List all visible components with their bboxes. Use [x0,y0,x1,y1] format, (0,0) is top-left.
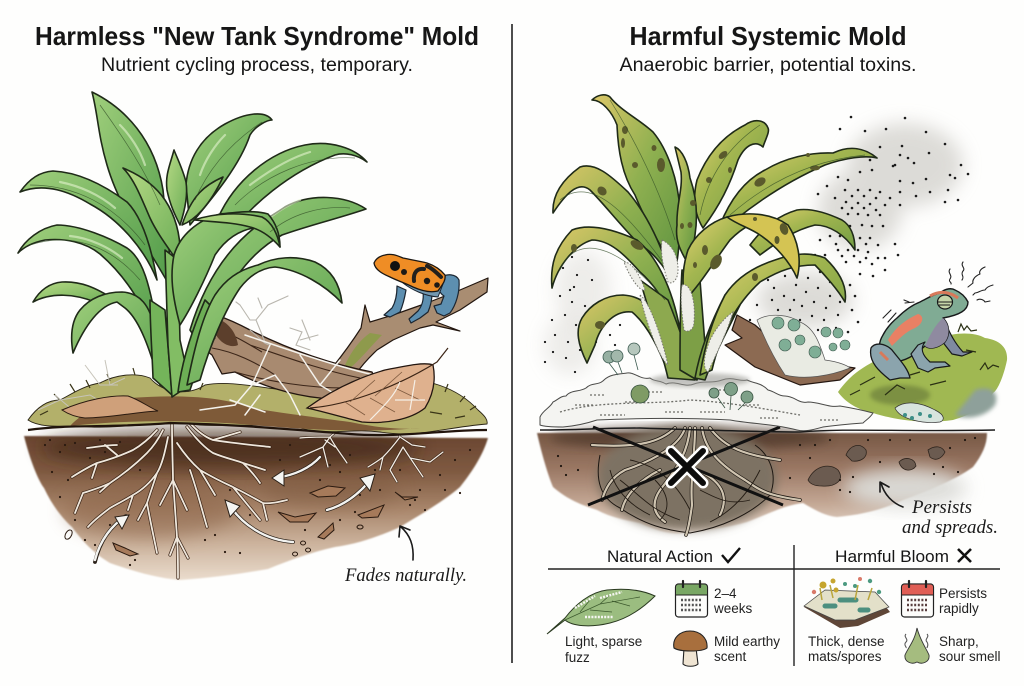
white fuzz on stems [624,240,733,372]
frog front legs [384,286,406,317]
fallen leaf left [62,396,158,418]
healthy plant [18,92,367,397]
sick frog [871,262,993,380]
mold fruiting bodies [631,382,753,410]
label: persists rapidly: rapidly [939,601,979,616]
label: sharp sour smell: Sharp, [939,634,979,649]
thin surface mycelium [38,360,125,412]
callout: fades naturally: Fades naturally. [344,565,467,586]
center divider [511,24,513,663]
crossed-out X over roots [588,427,783,505]
buried debris [113,486,418,556]
label: thick dense mats: mats/spores [808,649,882,664]
soil speckles [45,440,470,565]
leaf spots [571,126,820,329]
label: sharp sour smell [939,634,1001,664]
label: 2-4 weeks: 2–4 [714,586,737,601]
subheading: harmless: Nutrient cycling process, temporary. [101,55,413,76]
label: persists rapidly: Persists [939,586,987,601]
frog body [880,289,968,362]
stems [150,300,172,395]
dark lumps [808,445,945,486]
rotting log [203,315,378,398]
label: mild earthy scent: scent [714,649,747,664]
moldy stems [640,280,695,380]
label: light sparse fuzz [565,634,642,665]
frog body [374,254,445,292]
mossy branch [332,278,488,374]
label: light sparse fuzz: Light, sparse [565,634,642,649]
label: thick dense mats: Thick, dense [808,634,885,649]
frog rear leg [434,275,459,316]
icon: cross mark [958,549,971,562]
dry leaf right [307,348,448,422]
mycelium threads [200,296,410,420]
moss and topsoil surface [28,360,487,435]
heading: harmful: Harmful Systemic Mold [630,21,906,51]
spore dots [815,117,968,332]
sick log with fungus [725,315,855,385]
icon: red calendar [902,581,934,617]
heading: harmless: Harmless "New Tank Syndrome" Mold [35,21,479,51]
distress lines [883,262,993,322]
center leaves [167,150,187,225]
diseased plant [552,95,877,380]
arrow and callout: persists and spreads [880,482,998,538]
soil cross-section [24,428,488,580]
icon: mushroom [674,631,707,666]
column head: natural action: Natural Action [607,547,713,566]
label: sharp sour smell: sour smell [939,649,1001,664]
panel: harmless mold [18,21,488,586]
back leaves [190,197,366,345]
white mold blanket [540,343,995,432]
frog front leg [911,342,950,372]
panel: harmful mold [537,21,1007,666]
infected soil [537,426,987,533]
label: thick dense mats [808,634,885,664]
nutrient arrows [95,457,413,562]
frog rear leg [871,344,910,380]
icon: moldy mat [804,577,890,628]
icon: check mark [722,548,740,562]
column head: harmful bloom: Harmful Bloom [835,547,949,566]
label: 2-4 weeks: weeks [713,601,753,616]
diseased root ball [592,426,800,535]
label: mild earthy scent [714,634,780,664]
arrow and callout: persists and spreads: and spreads. [902,517,998,538]
center leaves [675,147,696,262]
label: persists rapidly [939,586,987,616]
icon: sour smell [905,628,929,663]
far front leg [938,318,972,356]
poison dart frog [374,254,459,323]
label: mild earthy scent: Mild earthy [714,634,780,649]
roots [72,420,443,578]
spore clouds [544,117,968,375]
subheading: harmful: Anaerobic barrier, potential toxins. [620,55,916,76]
label: light sparse fuzz: fuzz [565,650,590,665]
icon: fuzzy leaf [547,589,655,634]
icon: green calendar [676,581,708,617]
comparison table [547,545,1001,666]
mossy mound [838,324,1007,422]
arrow and callout: persists and spreads: Persists [911,497,972,518]
label: 2-4 weeks [713,586,753,616]
